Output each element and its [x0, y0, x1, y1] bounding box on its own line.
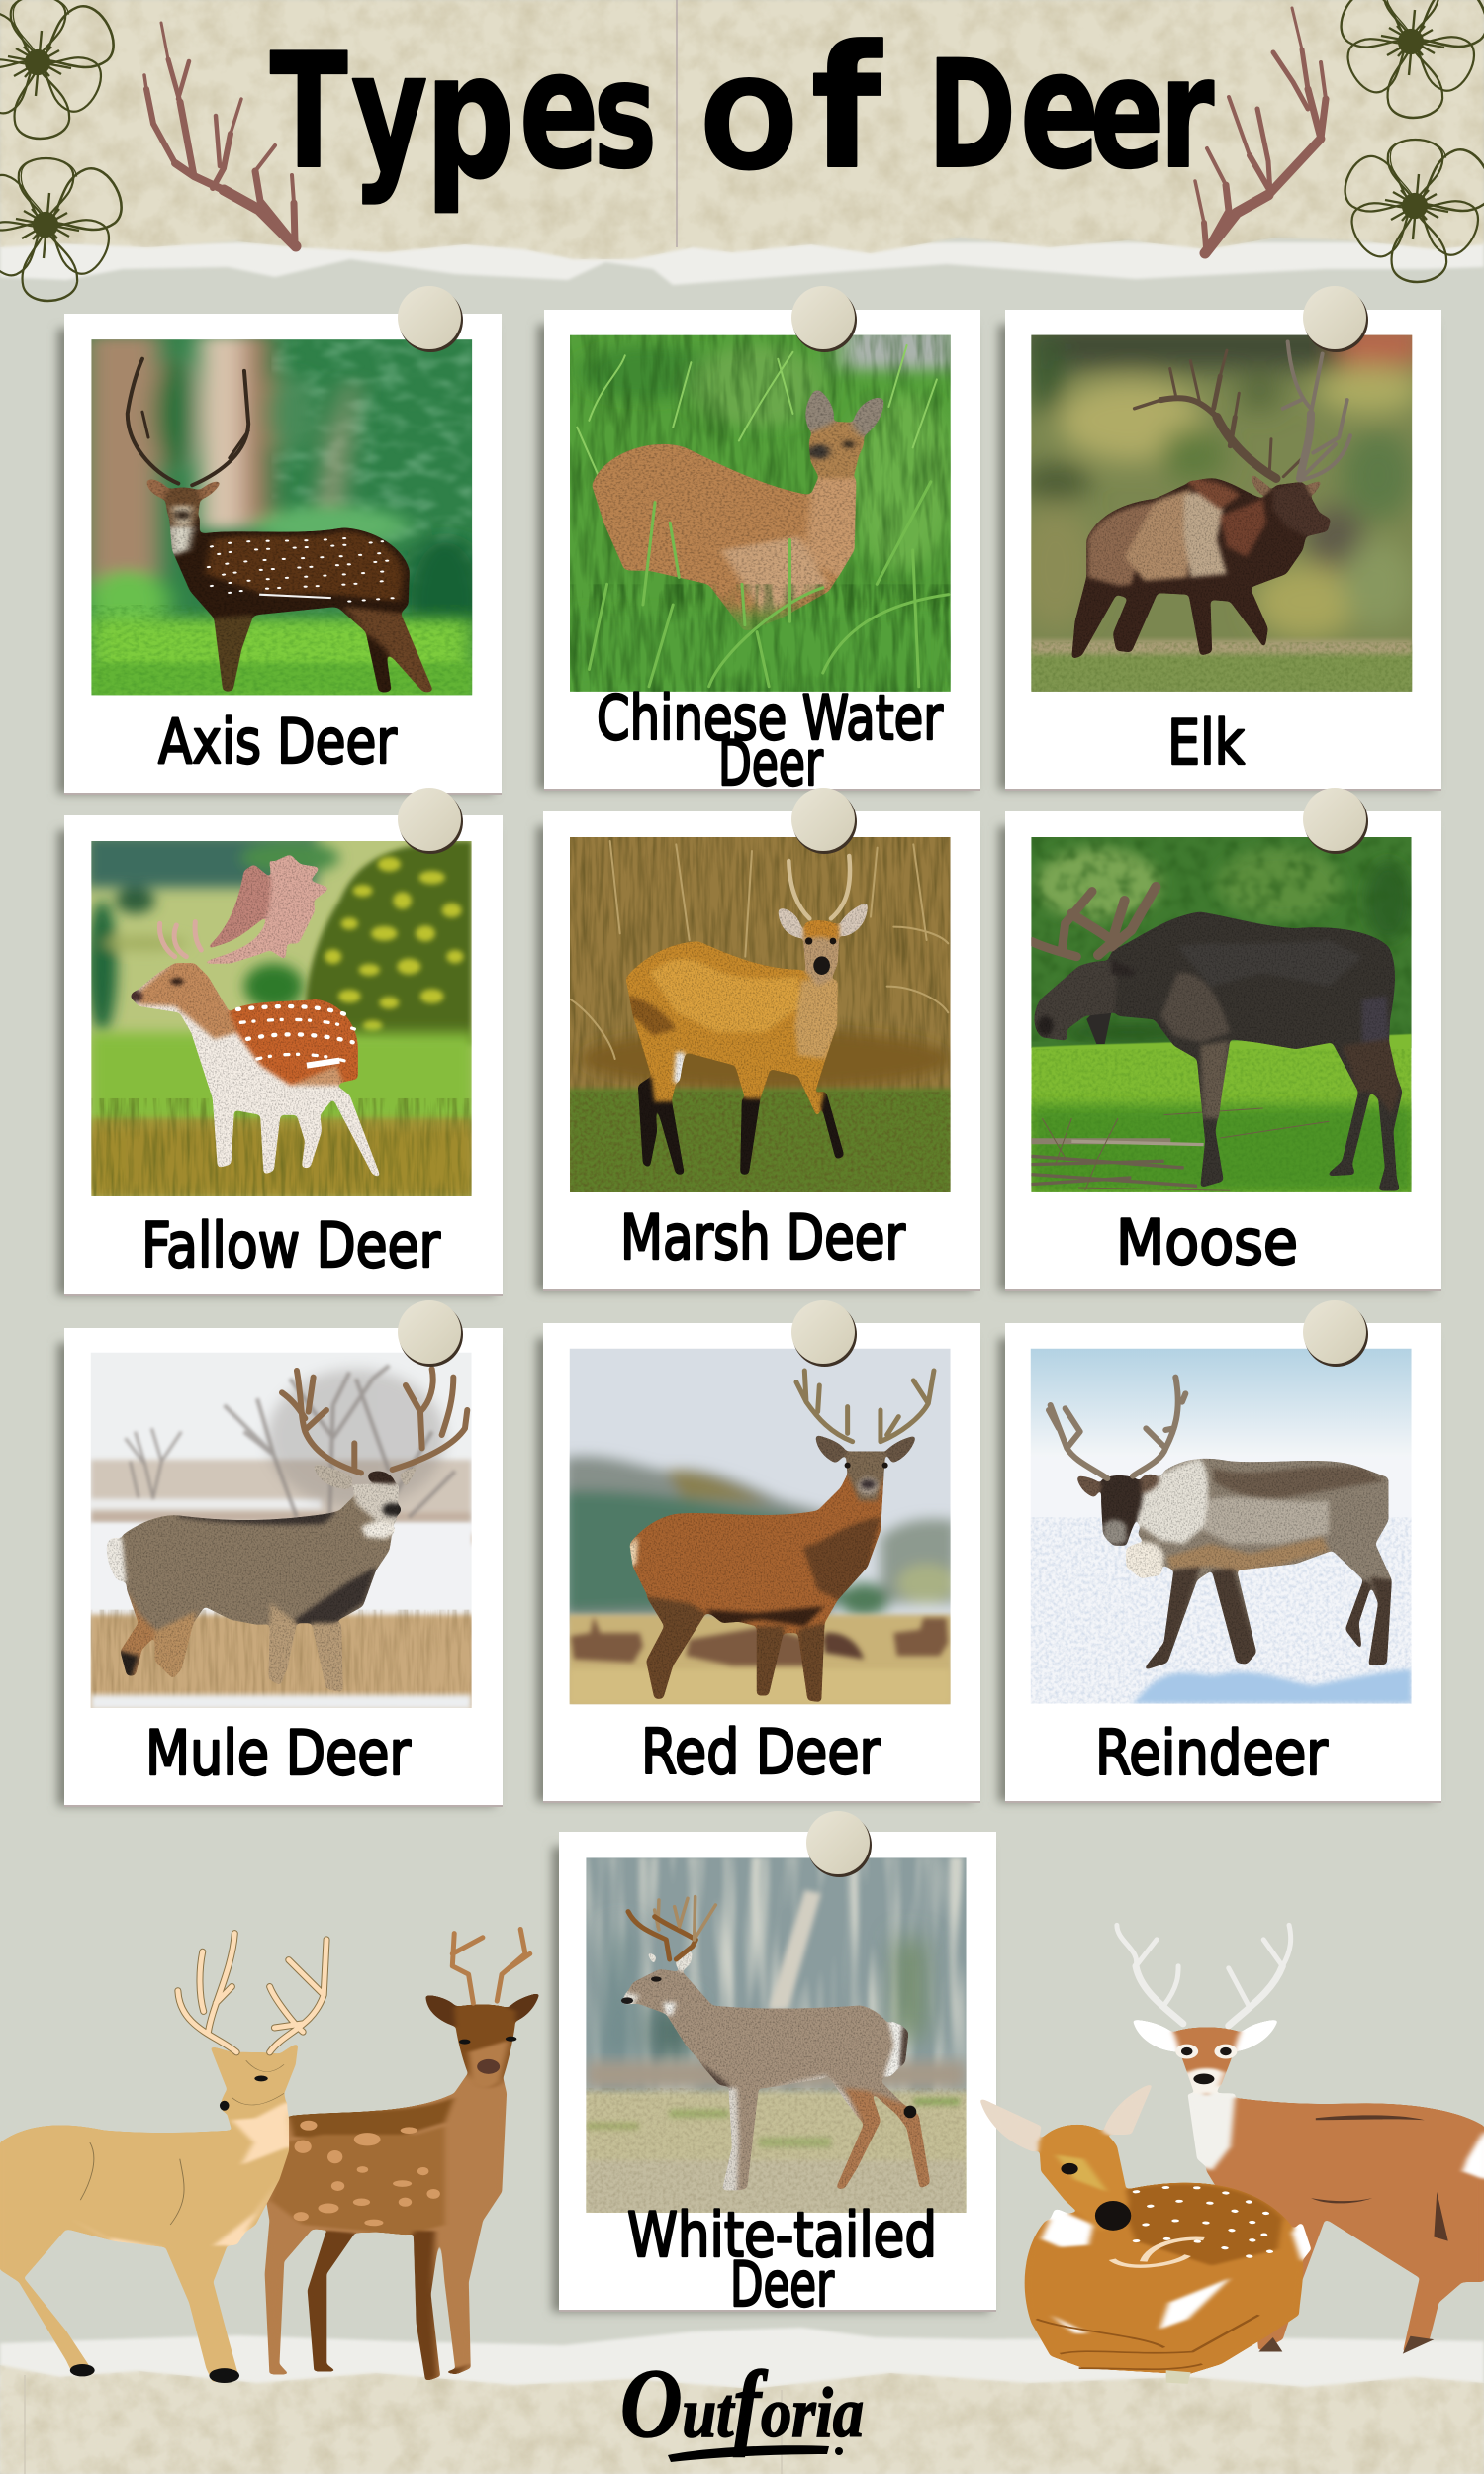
pin — [398, 788, 463, 854]
title: f — [811, 10, 883, 207]
photo: water deer in grass — [570, 325, 961, 692]
caption: Deer — [730, 2248, 834, 2321]
caption: Reindeer — [1095, 1717, 1328, 1789]
title: T — [270, 20, 347, 204]
photo: fallow deer in meadow — [86, 834, 475, 1197]
torn paper footer — [0, 2328, 1484, 2474]
illustration: resting fawn — [979, 2083, 1311, 2384]
caption: Red Deer — [641, 1716, 881, 1788]
title: s — [594, 29, 657, 202]
card: Mule Deer — [57, 1300, 503, 1806]
pin — [806, 1811, 872, 1877]
pin — [791, 788, 857, 854]
photo: mule deer in snow — [89, 1353, 475, 1710]
pin — [791, 286, 857, 352]
card: Elk — [998, 286, 1441, 790]
caption — [597, 682, 943, 800]
photo: elk on meadow — [1031, 334, 1413, 692]
title: D — [927, 29, 1016, 202]
illustration: orange stag — [1117, 1925, 1484, 2354]
caption: Moose — [1116, 1206, 1298, 1279]
photo: moose on lawn — [1029, 837, 1415, 1194]
pin — [1303, 286, 1368, 352]
card: White-tailed Deer — [552, 1811, 996, 2321]
title: e — [1020, 15, 1100, 205]
title — [270, 10, 1215, 217]
pin — [791, 1300, 857, 1367]
caption — [627, 2199, 937, 2321]
title: r — [1159, 25, 1215, 203]
photo: axis deer in forest — [85, 335, 487, 701]
caption: Axis Deer — [158, 706, 397, 778]
card: Red Deer — [536, 1300, 980, 1802]
title: e — [1090, 25, 1164, 203]
left antler decoration — [144, 23, 296, 246]
illustration: spotted brown stag — [265, 1930, 539, 2381]
photo: red deer on plain — [564, 1349, 957, 1707]
torn paper header — [0, 0, 1484, 285]
logo: Outforia: Outforia — [620, 2348, 864, 2458]
illustration: tan stag — [0, 1934, 326, 2383]
card: Reindeer — [998, 1300, 1441, 1802]
caption: White-tailed — [627, 2199, 937, 2271]
title: O — [700, 57, 797, 198]
caption: Mule Deer — [145, 1717, 411, 1789]
title: e — [519, 15, 599, 205]
right antler decoration — [1195, 8, 1326, 253]
photo: reindeer on snow — [1031, 1349, 1412, 1704]
card: Marsh Deer — [536, 788, 980, 1291]
caption: Marsh Deer — [620, 1201, 905, 1274]
caption: Deer — [718, 727, 823, 800]
pin — [398, 286, 463, 352]
title: p — [425, 15, 514, 217]
title: y — [351, 17, 427, 207]
pin — [1303, 788, 1368, 854]
pin — [398, 1300, 463, 1367]
pin — [1303, 1300, 1368, 1367]
caption: Elk — [1167, 707, 1245, 779]
flower decorations — [0, 0, 1484, 303]
card: Axis Deer — [57, 286, 502, 794]
card: Moose — [998, 788, 1441, 1291]
photo: marsh deer — [567, 837, 953, 1195]
card: Fallow Deer — [57, 788, 503, 1295]
caption: Fallow Deer — [141, 1209, 440, 1282]
photo: white-tailed deer — [584, 1857, 970, 2215]
card: Chinese Water Deer — [537, 286, 980, 800]
caption: Chinese Water — [597, 682, 943, 754]
